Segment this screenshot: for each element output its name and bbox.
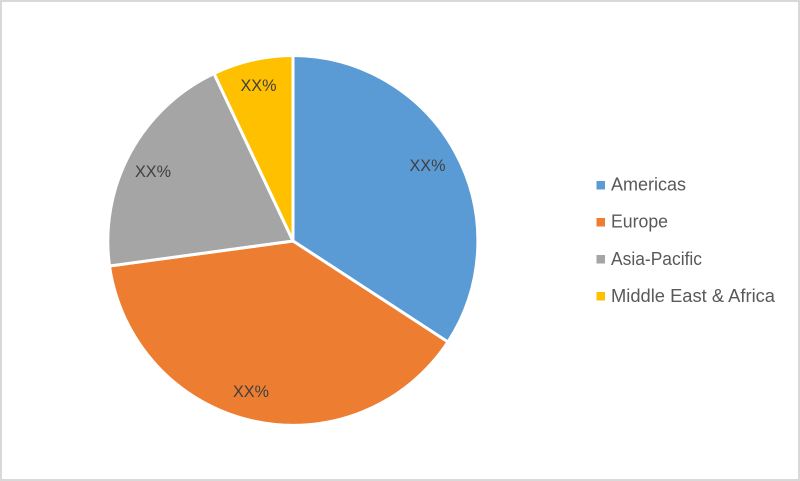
- legend item: Europe: Europe: [611, 212, 668, 232]
- label: Middle East & Africa value: XX%: [240, 76, 276, 95]
- label: Americas value: XX%: [410, 156, 446, 175]
- legend: [596, 174, 776, 306]
- label: Europe value: XX%: [233, 382, 269, 401]
- slice: Europe: [110, 241, 448, 425]
- legend item: Middle East & Africa: Middle East & Africa: [611, 286, 776, 306]
- pie chart: [108, 56, 478, 425]
- slice: Asia-Pacific: [108, 74, 293, 266]
- legend item: Asia-Pacific: Asia-Pacific: [611, 249, 702, 269]
- data labels: [135, 76, 446, 401]
- legend item: Americas: Americas: [611, 174, 686, 194]
- label: Asia-Pacific value: XX%: [135, 162, 171, 181]
- slice: Middle East & Africa: [214, 56, 293, 241]
- slice: Americas: [293, 56, 478, 342]
